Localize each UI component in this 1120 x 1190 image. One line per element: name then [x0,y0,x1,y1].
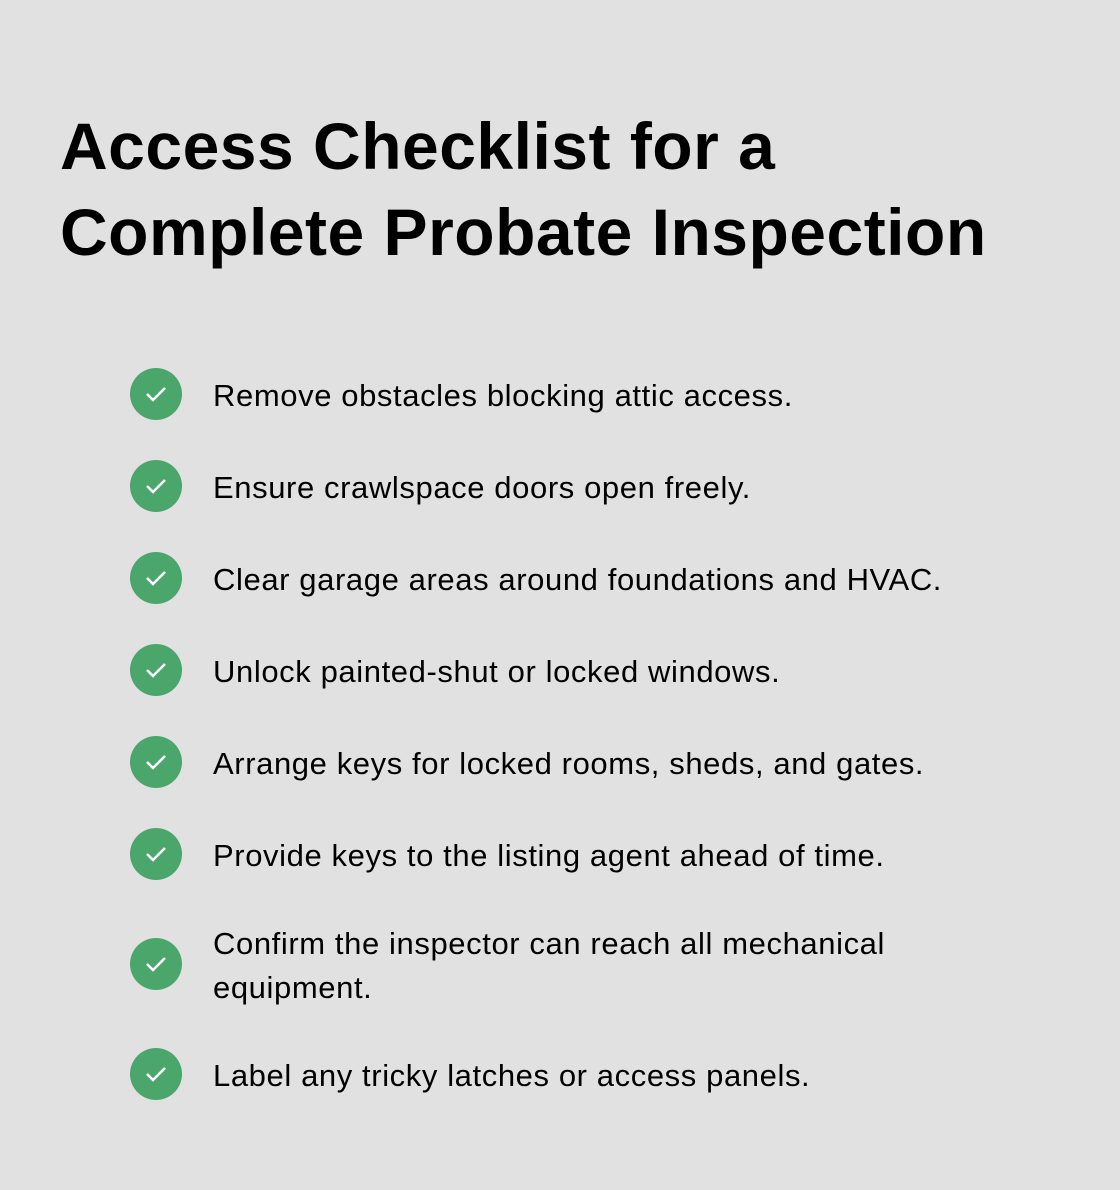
checklist item 7: Confirm the inspector can reach all mechanical [213,926,885,961]
checklist item 7 [130,926,885,1005]
checklist item 6: Provide keys to the listing agent ahead of time. [213,838,885,873]
checklist item 8: Label any tricky latches or access panels. [213,1058,810,1093]
checklist item 1 [130,368,793,420]
checklist item 5 [130,736,924,788]
checklist item 3 [130,552,942,604]
title: Complete Probate Inspection [60,195,987,269]
checklist item 3: Clear garage areas around foundations and HVAC. [213,562,942,597]
checklist item 5: Arrange keys for locked rooms, sheds, and gates. [213,746,924,781]
checklist item 4 [130,644,780,696]
checklist item 2: Ensure crawlspace doors open freely. [213,470,751,505]
checklist item 2 [130,460,751,512]
title [60,109,987,269]
checklist item 1: Remove obstacles blocking attic access. [213,378,793,413]
title: Access Checklist for a [60,109,775,183]
checklist item 6 [130,828,885,880]
checklist item 8 [130,1048,810,1100]
checklist item 7: equipment. [213,970,372,1005]
checklist item 4: Unlock painted-shut or locked windows. [213,654,780,689]
